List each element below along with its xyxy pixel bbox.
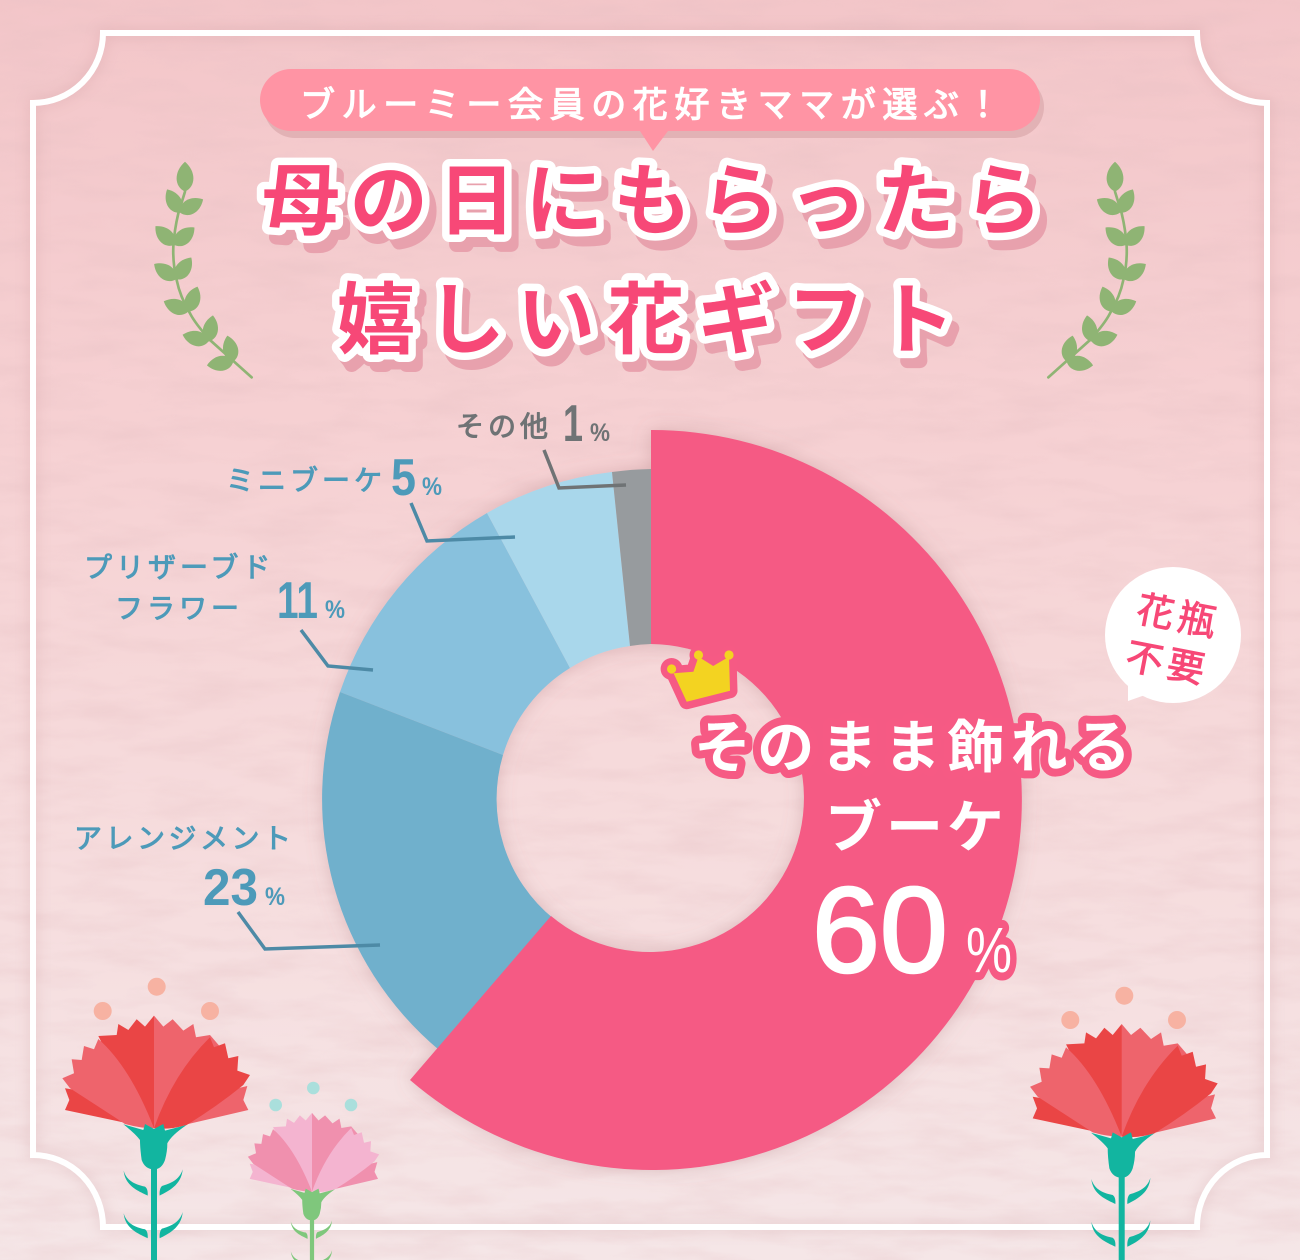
label: mini bouquet 5%: %: [422, 473, 442, 501]
speech bubble: no vase needed: [1105, 567, 1241, 703]
label: arrangement 23%: %: [265, 883, 285, 911]
title: 母の日にもらったら: [262, 139, 1052, 251]
speech bubble: no vase needed: 不要: [1122, 626, 1215, 695]
flower: large red carnation left: [62, 978, 250, 1260]
label: preserved flowers 11%: 11: [277, 572, 318, 630]
speech bubble: no vase needed: 花瓶: [1133, 579, 1226, 648]
main callout: 60% bouquet: [694, 702, 1137, 998]
main callout: 60% bouquet: そのまま飾れる: [694, 702, 1137, 784]
icon: left laurel: [150, 162, 252, 377]
label: other 1%: その他: [456, 405, 552, 445]
label: preserved flowers 11%: プリザーブド: [84, 546, 274, 586]
label: mini bouquet 5%: [226, 449, 515, 541]
slice: preserved flowers 11%: [340, 513, 570, 755]
donut chart: [322, 430, 1022, 1170]
slice: arrangement 23%: [322, 692, 554, 1050]
label: other 1%: [456, 395, 626, 488]
label: mini bouquet 5%: ミニブーケ: [226, 459, 386, 499]
slice: other 1%: [612, 469, 651, 646]
icon: crown: [661, 646, 738, 702]
subtitle banner: [260, 69, 1044, 151]
label: preserved flowers 11%: フラワー: [115, 587, 243, 627]
flower: small pink carnation: [248, 1082, 379, 1260]
label: arrangement 23%: 23: [203, 859, 258, 917]
icon: right laurel: [1048, 162, 1150, 377]
subtitle banner: ブルーミー会員の花好きママが選ぶ！: [300, 77, 1007, 128]
label: preserved flowers 11%: [84, 546, 373, 670]
label: preserved flowers 11%: %: [325, 596, 345, 624]
slice: ready-to-display bouquet 60%: [410, 430, 1022, 1170]
label: arrangement 23%: [74, 817, 380, 949]
label: mini bouquet 5%: 5: [391, 449, 416, 507]
label: arrangement 23%: アレンジメント: [74, 817, 295, 857]
title: [262, 139, 1052, 370]
label: other 1%: %: [590, 419, 610, 447]
flower: large red carnation right: [1030, 987, 1218, 1260]
main callout: 60% bouquet: %: [966, 914, 1012, 986]
title: 嬉しい花ギフト: [337, 258, 967, 370]
label: other 1%: 1: [563, 395, 583, 453]
slice: mini bouquet 5%: [487, 472, 630, 668]
main callout: 60% bouquet: 60: [812, 862, 948, 998]
main callout: 60% bouquet: ブーケ: [825, 782, 1008, 864]
